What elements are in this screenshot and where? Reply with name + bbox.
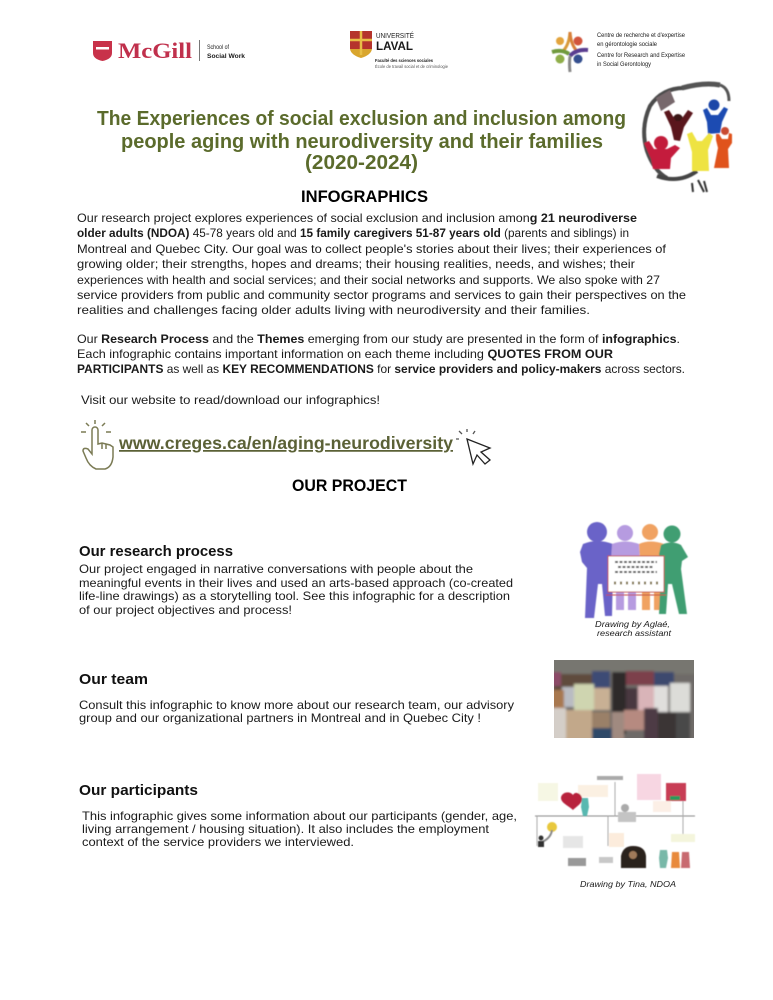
text: research process description: of our project objectives and process!	[79, 603, 292, 617]
text: participants description	[82, 809, 517, 849]
heading: our research process: Our research process	[79, 543, 233, 560]
logo: CREGES: Centre de recherche et d'expertise	[597, 32, 685, 39]
logo: CREGES: en gérontologie sociale	[597, 41, 657, 48]
heading: our participants: Our participants	[79, 782, 198, 799]
title: The Experiences of social exclusion and inclusion among	[97, 108, 626, 130]
intro paragraph: Our research project explores experiences of social exclusion and inclusion amon g 21 neurodiverse	[77, 211, 637, 225]
intro paragraph: older adults (NDOA) 45-78 years old and 15 family caregivers 51-87 years old (parents and siblings) in	[77, 226, 629, 240]
text: team description	[79, 698, 514, 725]
figure: blue	[703, 100, 728, 134]
text: participants description: This infographic gives some information about our participants (gender, age,	[82, 809, 517, 823]
title: people aging with neurodiversity and their families	[121, 131, 603, 153]
caption: Aglaé	[595, 619, 672, 638]
intro paragraph: growing older; their strengths, hopes and dreams; their housing realities, needs, and wishes; their	[77, 257, 635, 271]
text: team description: Consult this infographic to know more about our research team, our advisory	[79, 698, 514, 712]
text: research process description	[79, 562, 513, 617]
logo: McGill School of Social Work	[93, 38, 245, 63]
heading: infographics: INFOGRAPHICS	[301, 187, 428, 206]
text: research process description: Our project engaged in narrative conversations with people about the	[79, 562, 473, 576]
heading: our project: OUR PROJECT	[292, 476, 408, 495]
logo: CREGES: Centre for Research and Expertise	[597, 52, 685, 59]
intro paragraph: realities and challenges facing older adults living with neurodiversity and their families.	[77, 303, 590, 317]
website link: www.creges.ca/en/aging-neurodiversity	[118, 433, 453, 453]
caption: Aglaé: Drawing by Aglaé,	[595, 619, 670, 629]
caption: Aglaé: research assistant	[597, 628, 672, 638]
research process paragraph: Each infographic contains important information on each theme including QUOTES FROM OUR	[77, 347, 613, 361]
section: our team	[79, 671, 514, 725]
section: our research process	[79, 543, 513, 617]
caption: Tina: Drawing by Tina, NDOA	[580, 879, 676, 889]
logo: Université Laval: LAVAL	[376, 39, 413, 53]
section: our participants	[79, 782, 517, 849]
logo: McGill School of Social Work: School of	[207, 44, 229, 51]
logo: Université Laval: UNIVERSITÉ	[376, 31, 414, 40]
icon: pointing hand	[81, 420, 113, 469]
text: participants description: context of the service providers we interviewed.	[82, 835, 354, 849]
drawing: life-line timeline	[535, 774, 695, 868]
title	[97, 108, 626, 174]
intro paragraph: service providers from public and community sector programs and services to gain their perspectives on the	[77, 288, 686, 302]
icon: mouse cursor	[456, 429, 490, 464]
intro paragraph	[77, 211, 686, 317]
website invitation: Visit our website to read/download our infographics!	[81, 393, 380, 407]
logo: Université Laval: École de travail social et de criminologie	[375, 63, 448, 69]
research process paragraph: Our Research Process and the Themes emerging from our study are presented in the form of infographics.	[77, 332, 680, 346]
figure: maroon	[664, 110, 693, 141]
text: research process description: meaningful events in their lives and used an arts-based approach (co-created	[79, 576, 513, 590]
intro paragraph: Montreal and Quebec City. Our goal was to collect people's stories about their lives; their experiences of	[77, 242, 667, 256]
logo: McGill School of Social Work: McGill	[118, 38, 192, 63]
research process paragraph	[77, 332, 685, 376]
title: (2020-2024)	[305, 152, 418, 174]
figure: yellow	[687, 132, 713, 171]
drawing: four figures holding a banner	[580, 522, 688, 618]
text: research process description: life-line drawings) as a storytelling tool. See this infographic for a description	[79, 589, 510, 603]
text: team description: group and our organizational partners in Montreal and in Quebec City !	[79, 711, 481, 725]
logo: CREGES	[552, 32, 685, 72]
figure: orange	[714, 127, 732, 168]
logo: Université Laval	[350, 31, 448, 69]
logo: CREGES: in Social Gerontology	[597, 61, 652, 68]
icon: group of colourful figures in a ring	[644, 84, 732, 192]
logo: McGill School of Social Work: Social Work	[207, 53, 245, 60]
text: participants description: living arrangement / housing situation). It also includes the employment	[82, 822, 490, 836]
research process paragraph: PARTICIPANTS as well as KEY RECOMMENDATIONS for service providers and policy-makers across sectors.	[77, 362, 685, 376]
logo: Université Laval: Faculté des sciences sociales	[375, 58, 433, 63]
intro paragraph: experiences with health and social services; and their social networks and supports. We also spoke with 27	[77, 273, 660, 287]
photo: research team group	[554, 660, 694, 738]
figure: crimson	[644, 136, 680, 169]
heading: our team: Our team	[79, 671, 148, 688]
